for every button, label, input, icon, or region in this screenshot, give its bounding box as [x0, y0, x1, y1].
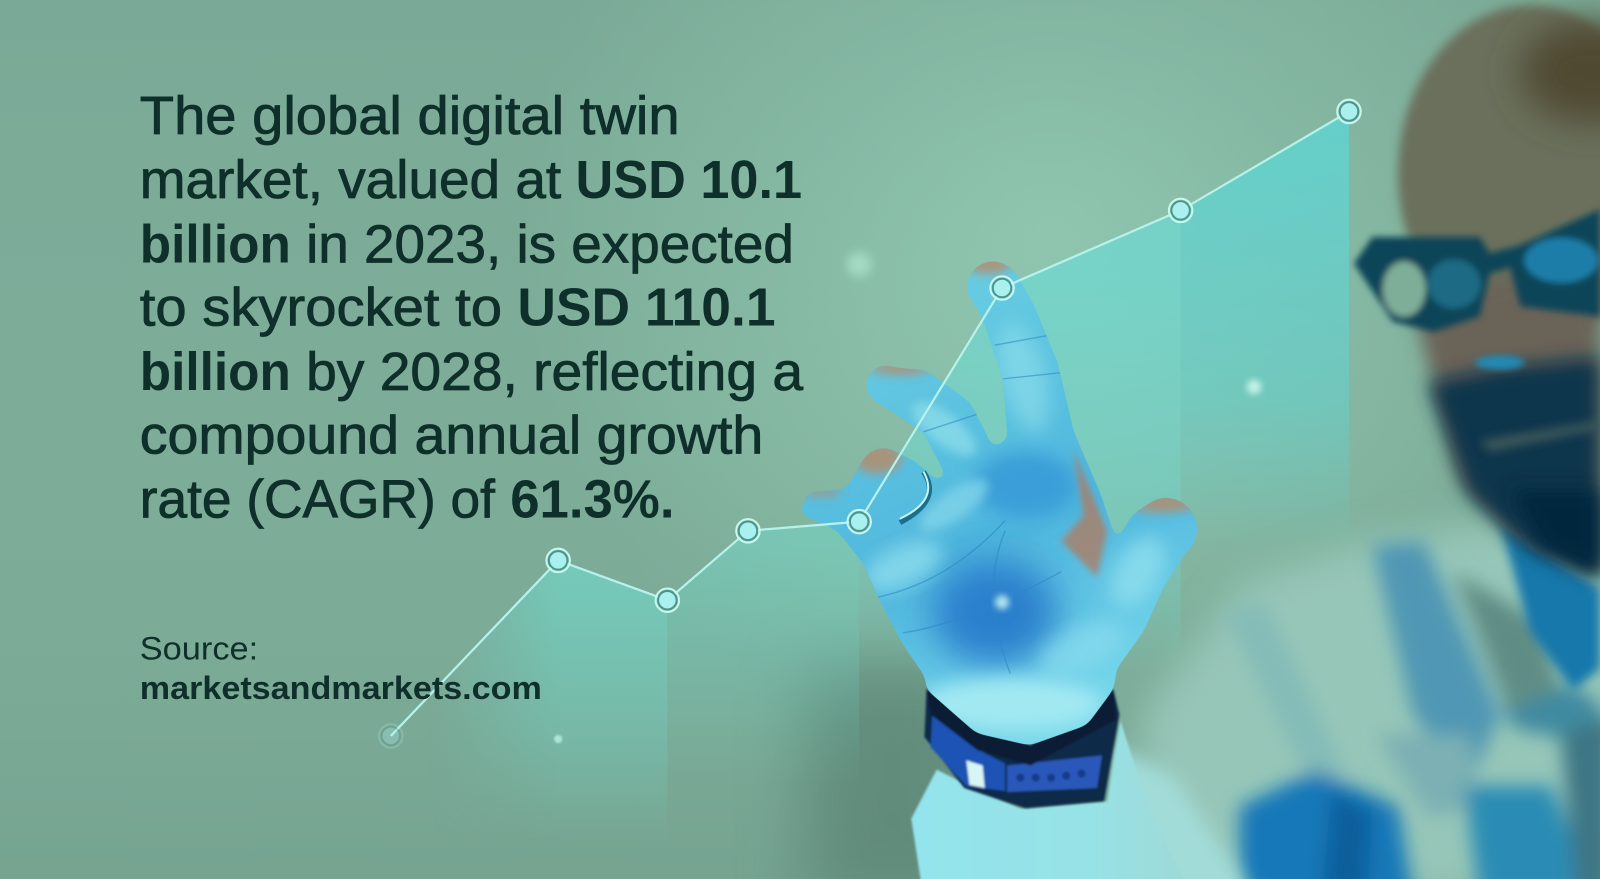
- wristband: [924, 689, 1119, 808]
- chart bars: [391, 111, 1349, 847]
- headline statement: market, valued at: [140, 150, 561, 210]
- man: face: [1413, 245, 1600, 572]
- hand with wristband: [800, 253, 1255, 879]
- palm lines: [878, 335, 1061, 674]
- shirt cuff: [911, 721, 1194, 879]
- man: shirt folds: [1224, 541, 1600, 879]
- sleeve blur: [1112, 745, 1255, 879]
- palm shadow: [932, 559, 1058, 666]
- line chart: [379, 100, 1361, 748]
- strap perforation: [1016, 770, 1086, 782]
- middle finger highlight: [910, 400, 979, 460]
- fingertip tints: [801, 253, 1200, 512]
- headline statement: [140, 86, 804, 530]
- headline statement: compound annual growth: [140, 405, 763, 465]
- headline statement: USD 10.1: [576, 150, 802, 210]
- headline statement: USD 110.1: [517, 278, 776, 338]
- heel of hand highlight: [1035, 618, 1123, 674]
- headline statement: by 2028, reflecting a: [306, 342, 804, 402]
- hand back highlight: [918, 476, 992, 534]
- source: Source:: [140, 629, 258, 666]
- man: collar: [1500, 522, 1600, 690]
- headline statement: billion: [140, 342, 291, 402]
- headline statement: to skyrocket to: [140, 278, 502, 338]
- data point halos: [379, 100, 1361, 748]
- data points: [382, 102, 1358, 745]
- knuckle highlight: [863, 534, 950, 600]
- headline statement: in 2023, is expected: [306, 214, 794, 274]
- source: marketsandmarkets.com: [140, 669, 542, 706]
- ring: [900, 472, 930, 523]
- man, out of focus: [1133, 5, 1600, 879]
- glow spots: [554, 252, 1261, 743]
- finger side tint: [1061, 449, 1107, 577]
- upper palm shadow: [974, 452, 1077, 518]
- man: head shadow: [1520, 21, 1600, 123]
- trend line: [391, 111, 1349, 736]
- headline statement: The global digital twin: [140, 86, 680, 146]
- man: glasses: [1354, 209, 1600, 332]
- man: shirt: [1133, 521, 1600, 879]
- hand shape: [800, 261, 1197, 745]
- man: mouth: [1480, 421, 1600, 451]
- headline statement: 61.3%.: [510, 470, 674, 530]
- index finger highlight: [994, 322, 1055, 436]
- wrist highlight: [918, 678, 1102, 731]
- man: nose highlight: [1476, 355, 1524, 370]
- man: head: [1398, 5, 1600, 342]
- man: chin shadow: [1510, 490, 1600, 577]
- hand shading: [801, 253, 1200, 731]
- man: beard: [1429, 357, 1600, 577]
- headline statement: billion: [140, 214, 291, 274]
- headline statement: rate (CAGR) of: [140, 470, 496, 530]
- thumb highlight: [1105, 531, 1170, 611]
- source: [140, 629, 542, 706]
